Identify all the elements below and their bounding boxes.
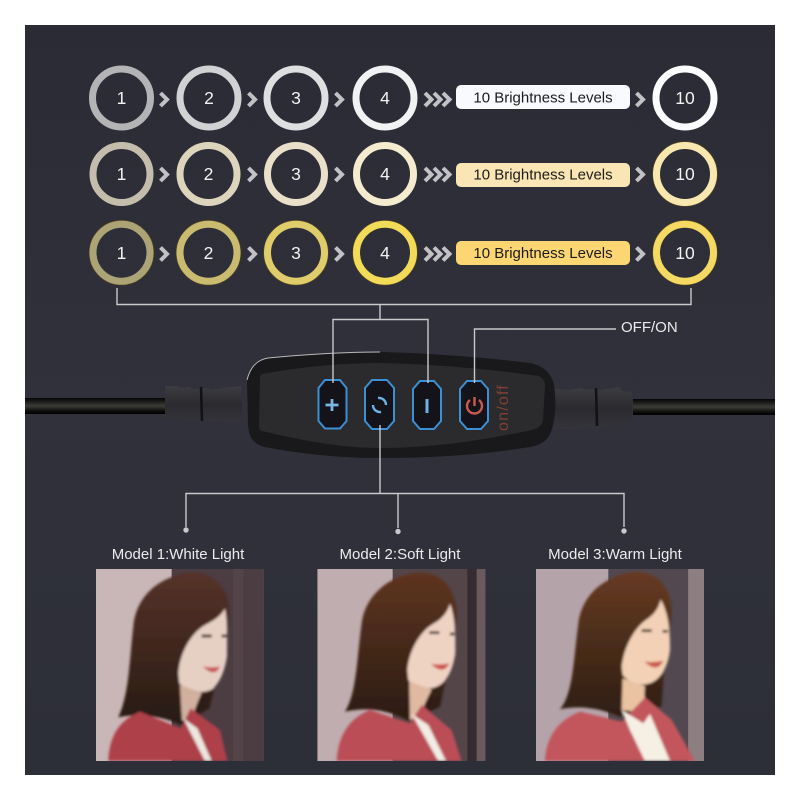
ring: warm level 1 bbox=[90, 221, 154, 285]
ring: warm level 2: 2 bbox=[204, 243, 213, 263]
button: mode bbox=[365, 380, 394, 429]
arrows: soft row bbox=[160, 168, 643, 181]
button: plus bbox=[318, 380, 346, 428]
row: white light brightness levels bbox=[92, 69, 714, 127]
cable: right bbox=[553, 387, 775, 430]
ring: white level 2 bbox=[180, 69, 238, 127]
row: warm light brightness levels bbox=[90, 221, 717, 285]
ring: soft level 10 bbox=[653, 142, 717, 206]
ring: white level 4 bbox=[356, 69, 414, 127]
cable: left bbox=[25, 386, 243, 423]
button: minus bbox=[413, 381, 441, 429]
pill: soft 10 brightness levels: 10 Brightness Levels bbox=[473, 166, 613, 184]
ring: warm level 4 bbox=[353, 221, 417, 285]
connector: mode button to three models bbox=[183, 425, 627, 534]
photo: model 1 white light portrait bbox=[96, 569, 263, 761]
pill: soft 10 brightness levels bbox=[456, 163, 630, 187]
ring: soft level 3 bbox=[268, 146, 324, 202]
ring: warm level 1: 1 bbox=[117, 243, 126, 263]
ring: soft level 4 bbox=[356, 146, 414, 202]
ring: soft level 2: 2 bbox=[204, 164, 213, 184]
label: model 3: Model 3:Warm Light bbox=[548, 546, 683, 563]
ring: warm level 3: 3 bbox=[291, 243, 301, 263]
ring: white level 10: 10 bbox=[675, 88, 695, 108]
ring: soft level 1 bbox=[93, 146, 150, 202]
photo: model 2 soft light portrait bbox=[317, 569, 485, 761]
ring: soft level 10: 10 bbox=[675, 164, 695, 184]
ring: white level 1: 1 bbox=[117, 88, 126, 108]
label: model 2: Model 2:Soft Light bbox=[340, 546, 461, 563]
row: soft light brightness levels bbox=[93, 142, 717, 206]
ring: warm level 10: 10 bbox=[675, 243, 695, 263]
ring: white level 10 bbox=[656, 69, 714, 127]
label: model 1: Model 1:White Light bbox=[112, 546, 245, 563]
ring: soft level 4: 4 bbox=[380, 164, 390, 184]
arrows: warm row bbox=[160, 248, 643, 260]
pill: warm 10 brightness levels bbox=[456, 241, 630, 265]
photo: model 3 warm light portrait bbox=[536, 569, 704, 761]
ring: warm level 3 bbox=[264, 221, 328, 285]
pill: white 10 brightness levels: 10 Brightness Levels bbox=[473, 90, 613, 106]
ring: warm level 2 bbox=[176, 221, 240, 285]
ring: white level 1 bbox=[92, 69, 150, 127]
arrows: white row bbox=[160, 93, 643, 106]
ring: soft level 3: 3 bbox=[291, 164, 301, 184]
button: power bbox=[460, 381, 488, 429]
ring: white level 3: 3 bbox=[291, 88, 301, 108]
ring: soft level 1: 1 bbox=[117, 164, 126, 184]
ring: white level 4: 4 bbox=[380, 88, 390, 108]
connector: power button to OFF/ON bbox=[474, 329, 616, 383]
label: on/off on device: on/off bbox=[495, 384, 512, 431]
label: OFF/ON: OFF/ON bbox=[621, 319, 678, 336]
pill: warm 10 brightness levels: 10 Brightness Levels bbox=[473, 245, 613, 262]
control unit body bbox=[247, 352, 555, 458]
ring: white level 3 bbox=[267, 69, 325, 127]
pill: white 10 brightness levels bbox=[456, 85, 630, 109]
ring: white level 2: 2 bbox=[204, 88, 214, 108]
ring: warm level 10 bbox=[653, 221, 717, 285]
bracket: rows to plus and minus buttons bbox=[117, 288, 691, 383]
ring: warm level 4: 4 bbox=[380, 243, 390, 263]
ring: soft level 2 bbox=[180, 146, 237, 202]
